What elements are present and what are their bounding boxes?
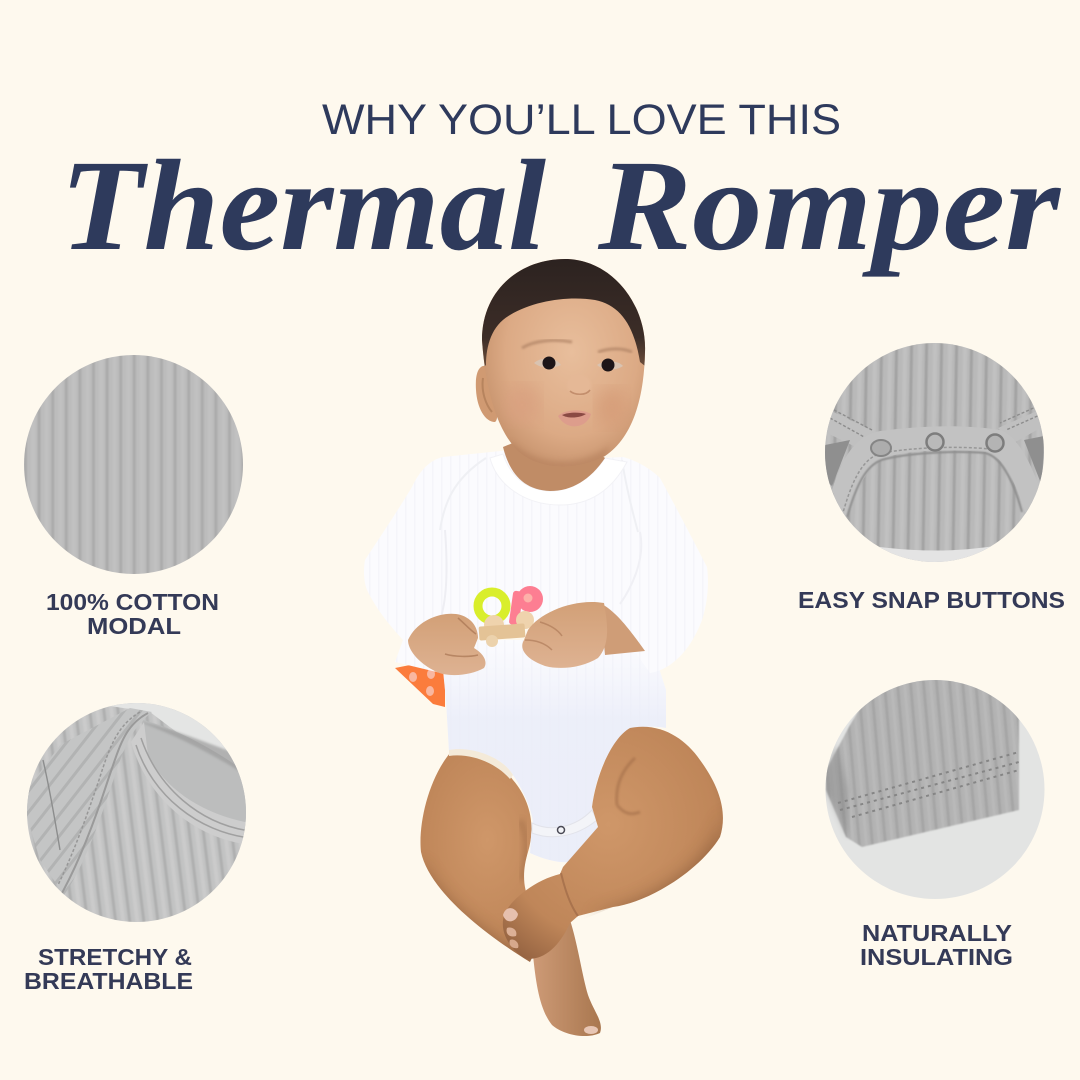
face (482, 259, 645, 466)
label: naturally insulating: NATURALLY (862, 920, 1012, 946)
label: 100% cotton modal: 100% COTTON (46, 589, 219, 615)
torso and crotch (440, 640, 666, 862)
ear (476, 366, 497, 422)
inner neck (142, 720, 250, 825)
mouth (558, 410, 591, 426)
eyes (534, 356, 623, 372)
title: thermal romper: Thermal (60, 134, 546, 278)
label: 100% cotton modal: MODAL (87, 613, 181, 639)
title: thermal romper (60, 134, 1062, 278)
lower leg (530, 920, 601, 1036)
heading: why you'll love this: WHY YOU’LL LOVE THIS (322, 96, 841, 144)
toes (503, 908, 518, 921)
title: thermal romper: Romper (597, 134, 1062, 278)
left thigh (420, 754, 532, 962)
hair (482, 259, 646, 366)
label: easy snap buttons: EASY SNAP BUTTONS (798, 587, 1065, 613)
chest and sleeves (364, 450, 708, 674)
label: stretchy and breathable (24, 944, 193, 994)
left hand (408, 614, 486, 675)
shoulder seams (825, 406, 1044, 486)
right hand (522, 602, 607, 668)
label: 100% cotton modal (46, 589, 219, 639)
right forearm (600, 603, 645, 655)
panel: easy snap buttons swatch (825, 343, 1044, 562)
stitching (838, 752, 1019, 817)
snap buttons (871, 434, 1004, 456)
panel: stretchy and breathable swatch (27, 703, 246, 922)
envelope shoulder flap (25, 708, 152, 895)
eyebrows (522, 340, 632, 352)
collar band (131, 722, 250, 845)
neck ribbing (490, 454, 627, 505)
panel: naturally insulating swatch (820, 675, 1050, 905)
panel: 100% cotton modal swatch (20, 350, 250, 580)
head (476, 259, 646, 461)
nose (567, 375, 591, 395)
orange teether (395, 658, 445, 707)
illustration: baby in white romper (364, 250, 725, 1036)
label: stretchy and breathable: STRETCHY & (38, 944, 192, 970)
right leg and foot (503, 727, 725, 959)
toy: letters and wooden car (478, 586, 543, 647)
cheek shading (514, 390, 623, 466)
label: naturally insulating: INSULATING (860, 944, 1013, 970)
neck (503, 440, 605, 491)
sleeve seams (440, 458, 486, 530)
romper body (364, 450, 708, 862)
label: stretchy and breathable: BREATHABLE (24, 968, 193, 994)
label: naturally insulating (860, 920, 1013, 970)
lower light area (880, 546, 990, 562)
placket band (832, 426, 1040, 525)
belly tint (440, 640, 666, 862)
